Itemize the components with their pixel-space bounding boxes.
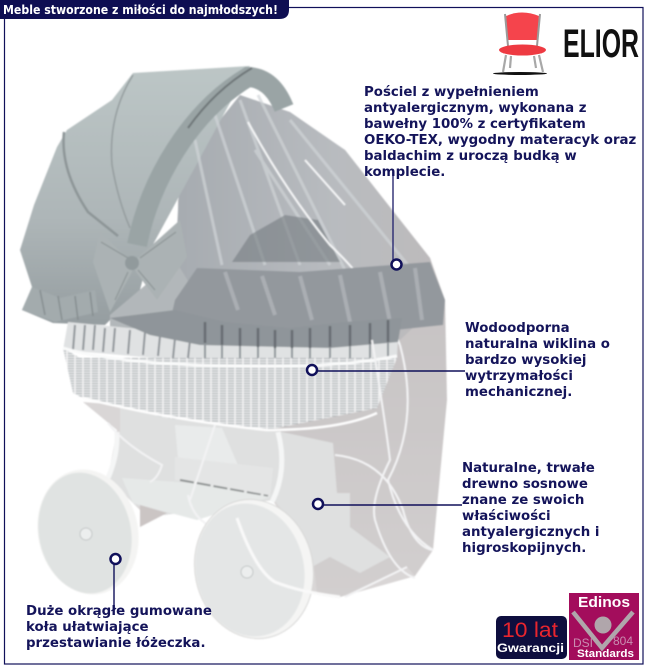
callout: wheels: przestawianie łóżeczka.	[26, 635, 206, 651]
rear wheel	[26, 460, 150, 604]
callout: wheels	[26, 554, 212, 651]
arch tube	[137, 77, 284, 245]
header banner	[0, 0, 289, 19]
badge: 10 year warranty: 10 lat	[502, 619, 558, 642]
badge: Edinos standards: Edinos	[578, 594, 630, 611]
callout: bedding: OEKO-TEX, wygodny materacyk oraz	[364, 133, 637, 148]
ribbon	[248, 122, 400, 345]
callout: bedding: Pościel z wypełnieniem	[364, 84, 539, 100]
callout: pine wood: drewno sosnowe	[462, 477, 588, 492]
callout: wicker: naturalna wiklina o	[465, 337, 610, 352]
callout: pine wood: higroskopijnych.	[462, 541, 586, 556]
callout: wicker: wytrzymałości	[465, 368, 573, 384]
callout: bedding: bawełny 100% z certyfikatem	[364, 117, 586, 132]
callout: pine wood: antyalergicznych i	[462, 525, 599, 540]
mattress band	[170, 262, 445, 335]
callout: pine wood: znane ze swoich	[462, 493, 584, 508]
wicker slats above basket	[63, 322, 398, 362]
callout: pine wood	[313, 461, 599, 556]
wooden rocker panel	[110, 408, 390, 573]
callout: wicker: Wodoodporna	[465, 321, 570, 336]
icon: chair	[493, 12, 547, 75]
cross beam and plate	[175, 457, 273, 497]
badge: 10 year warranty	[496, 616, 567, 659]
callout: wicker: bardzo wysokiej	[465, 353, 586, 368]
wicker basket	[63, 348, 397, 430]
callout: bedding: baldachim z uroczą budką w	[364, 149, 577, 164]
badge: Edinos standards: Standards	[577, 648, 634, 660]
ruffles	[110, 310, 402, 348]
callout: wicker: mechanicznej.	[465, 385, 572, 400]
callout: wheels: Duże okrągłe gumowane	[26, 604, 212, 619]
callout: pine wood: Naturalne, trwałe	[462, 461, 595, 476]
base under basket	[83, 402, 415, 597]
bow	[93, 220, 187, 312]
front wheel	[182, 488, 340, 650]
net hem and ribbons	[108, 340, 433, 597]
callout: bedding: antyalergicznym, wykonana z	[364, 101, 587, 116]
badge: Edinos standards	[569, 593, 639, 660]
callout: wicker	[307, 321, 610, 400]
callout: wheels: koła ułatwiające	[26, 620, 149, 635]
callout: pine wood: właściwości	[462, 508, 551, 524]
cradle illustration	[20, 66, 447, 650]
panel: hood canopy	[20, 66, 250, 325]
net right side	[178, 110, 447, 597]
logo: red chair and ELIOR wordmark	[493, 12, 639, 75]
header banner: Meble stworzone z miłości do najmłodszych!	[3, 3, 278, 17]
callout: bedding: komplecie.	[364, 165, 445, 180]
badge: Edinos standards: 804	[613, 634, 633, 648]
callout: bedding	[364, 84, 637, 270]
badge: 10 year warranty: Gwarancji	[497, 641, 564, 655]
net folds	[110, 260, 200, 340]
badge: Edinos standards: DSI	[573, 636, 593, 650]
